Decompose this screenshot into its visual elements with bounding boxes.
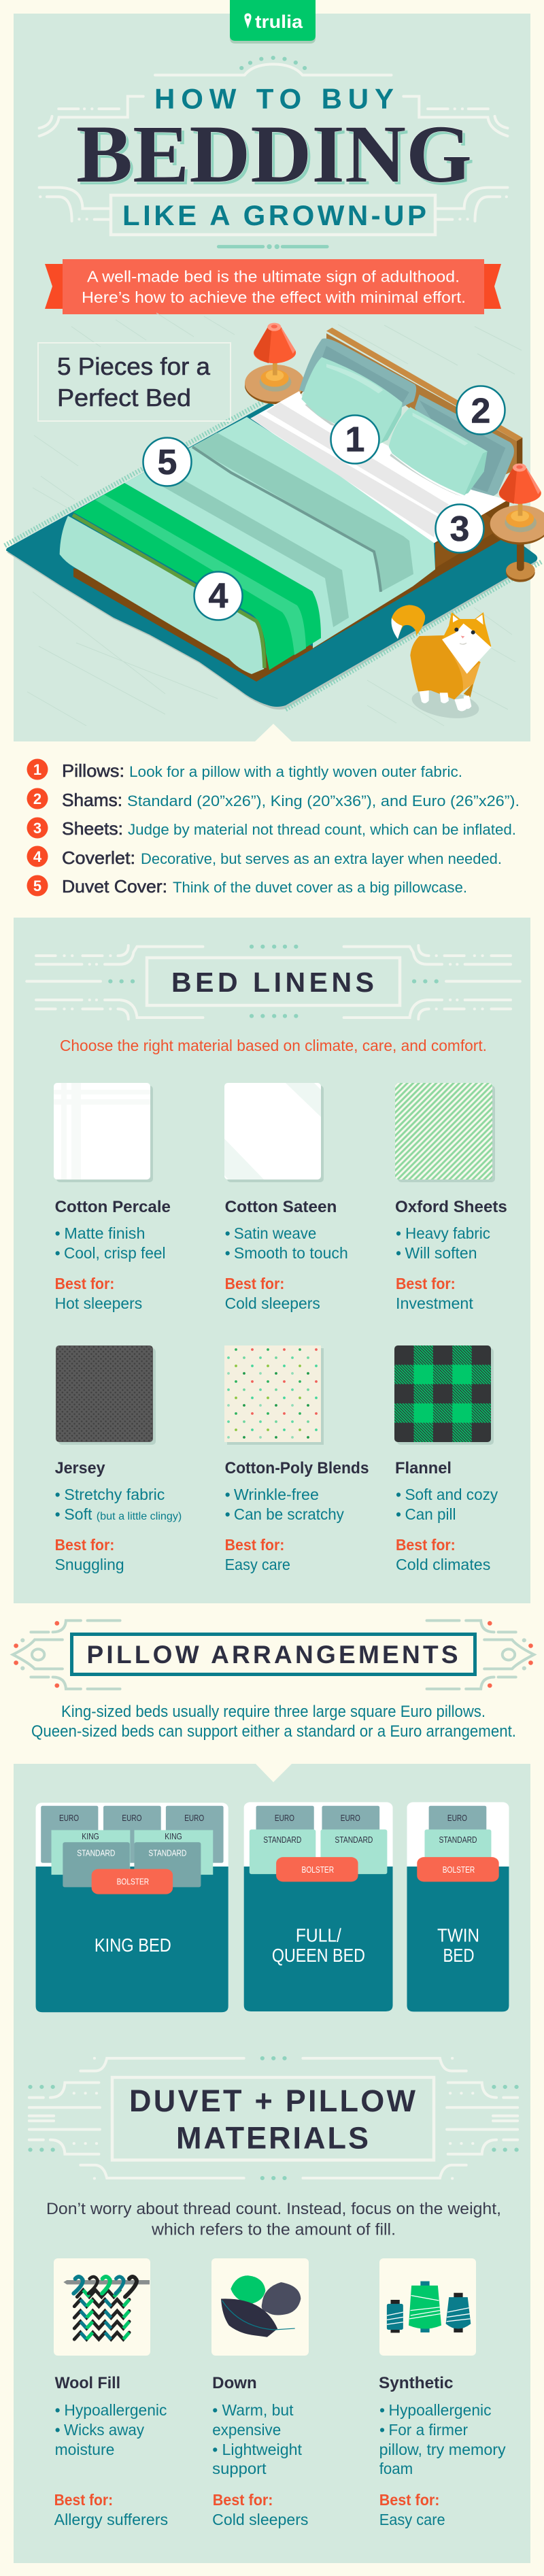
card: oxford sheets: • [396,1244,401,1262]
icon: thread spools [387,2281,471,2332]
diagram: full/queen bed: STANDARD [335,1835,373,1845]
duvet heading ornament [29,2058,517,2178]
card: jersey: Best for: [55,1536,114,1554]
card: jersey: • [55,1486,61,1503]
card: cotton-poly blends: Cotton-Poly Blends [225,1459,369,1477]
illustration: isometric bed with lamps and cat [5,313,544,726]
card: jersey: • [55,1505,61,1523]
card: oxford sheets: Will soften [405,1244,477,1262]
item 5 duvet cover: Think of the duvet cover as a big pillowcase. [173,879,467,896]
item 3 sheets: 3 [33,820,41,837]
card: cotton sateen: • [225,1224,231,1242]
card: synthetic: For a firmer [389,2421,468,2439]
card: wool fill: Hypoallergenic [64,2401,167,2419]
card: flannel: Flannel [395,1459,452,1477]
card: cotton percale: Best for: [55,1275,114,1292]
list: five pieces [27,759,520,897]
title ornament [39,58,507,247]
card: synthetic: Best for: [379,2491,439,2509]
card: cotton percale [54,1083,171,1312]
card: cotton-poly blends: Best for: [225,1536,284,1554]
card: down: • [212,2401,218,2419]
title: how to buy: HOW TO BUY [154,83,394,114]
item 5 duvet cover: Duvet Cover: [62,876,167,897]
duvet [124,417,435,648]
card: cotton-poly blends: • [225,1486,231,1503]
icon: knitting [63,2277,150,2339]
card: synthetic: • [379,2421,385,2439]
card: synthetic: Easy care [379,2511,445,2528]
card: cotton sateen: Satin weave [234,1224,316,1242]
item 1 pillows: Pillows: [62,760,124,781]
diagram: full/queen bed: FULL/ [296,1925,341,1945]
item 5 duvet cover: 5 [33,877,41,894]
diagram: full/queen bed: BOLSTER [302,1864,334,1875]
ribbon banner: Here’s how to achieve the effect with minimal effort. [82,288,466,306]
card: oxford sheets: • [396,1224,401,1242]
card: wool fill: Best for: [54,2491,113,2509]
card: down: Cold sleepers [212,2511,309,2528]
coverlet [73,483,321,670]
card: oxford sheets: Oxford Sheets [395,1198,507,1216]
diagram: king bed: BOLSTER [117,1876,149,1887]
bed frame [73,499,510,682]
panel: bed linens [14,918,530,1603]
card: down: Down [212,2374,257,2392]
card: cotton-poly blends [224,1345,369,1573]
panel: intro and bed illustration [14,14,530,741]
item 4 coverlet: 4 [33,848,42,865]
card: oxford sheets: Heavy fabric [405,1224,490,1242]
card: flannel: Best for: [396,1536,456,1554]
callout: 5 pieces [38,343,231,421]
heading: duvet + pillow materials: MATERIALS [176,2121,369,2155]
card: cotton sateen: Cotton Sateen [225,1198,337,1216]
ribbon banner [45,259,501,314]
card: cotton sateen: • [225,1244,231,1262]
bed linens ornament [27,946,520,1019]
card: cotton percale: • [55,1224,61,1242]
duvet stripes [160,433,413,627]
card: cotton percale: Cotton Percale [55,1198,171,1216]
card: synthetic [379,2258,506,2528]
card: down [211,2258,309,2528]
card: wool fill: Wicks away [64,2421,144,2439]
heading: bed linens [147,958,400,1005]
callout: 5 pieces: Perfect Bed [57,384,191,412]
diagram: full/queen bed: EURO [275,1813,294,1823]
diagram: king bed: EURO [59,1813,79,1823]
badge numerals: 2 [471,392,490,431]
card: down: Warm, but [222,2401,294,2419]
card: wool fill: Wool Fill [55,2374,120,2392]
item 2 shams [27,788,520,810]
card: wool fill [54,2258,168,2528]
card: synthetic: pillow, try memory [379,2441,506,2458]
card: oxford sheets: Best for: [396,1275,456,1292]
card: jersey: Soft [64,1505,92,1523]
card: synthetic: foam [379,2460,413,2477]
notch: pointer at panel bottom [255,724,292,741]
card: down: Lightweight [222,2441,303,2458]
heading: duvet + pillow materials [112,2077,434,2160]
card: jersey: Jersey [55,1459,105,1477]
card: cotton-poly blends: • [225,1505,231,1523]
item 2 shams: 2 [33,790,41,807]
item 4 coverlet [27,846,502,868]
card: cotton-poly blends: Can be scratchy [234,1505,344,1523]
item 2 shams: Standard (20”x26”), King (20”x36”), and Euro (26”x26”). [127,792,520,809]
badge numerals [158,392,490,616]
diagram: twin bed: BOLSTER [443,1864,475,1875]
text: thread count intro: which refers to the amount of fill. [151,2220,396,2239]
card: jersey [55,1345,182,1573]
heading: pillow arrangements: PILLOW ARRANGEMENTS [87,1641,458,1669]
diagram: king bed: STANDARD [148,1847,186,1858]
logo: trulia tab: trulia [255,12,303,32]
text: pillow intro: King-sized beds usually require three large square Euro pillows. [61,1703,486,1721]
card: wool fill: Allergy sufferers [54,2511,168,2528]
card: flannel: Cold climates [396,1556,490,1573]
card: flannel: Can pill [405,1505,456,1523]
card: down: expensive [212,2421,281,2439]
back pillow shams [299,338,514,498]
badge numerals: 4 [209,577,228,616]
card: oxford sheets: Investment [396,1294,473,1312]
callout: 5 pieces: 5 Pieces for a [57,352,211,380]
diagram: full/queen bed: EURO [341,1813,360,1823]
card: wool fill: • [55,2421,61,2439]
foot of bed [60,516,264,674]
card: cotton-poly blends: Easy care [225,1556,290,1573]
headboard [326,328,522,481]
diagram: king bed: STANDARD [77,1847,115,1858]
diagram: twin bed [407,1802,509,2011]
card: wool fill: • [55,2401,61,2419]
item 4 coverlet: Decorative, but serves as an extra layer when needed. [141,850,502,867]
heading: pillow arrangements [72,1634,475,1675]
card: down: • [212,2441,218,2458]
text: thread count intro: Don’t worry about thread count. Instead, focus on the weight, [46,2200,501,2218]
badge numerals: 1 [345,420,364,460]
pillow arrangements ornament [13,1620,534,1689]
heading: duvet + pillow materials: DUVET + PILLOW [129,2084,416,2118]
diagram: king bed: EURO [122,1813,141,1823]
cat [392,605,491,723]
item 4 coverlet: Coverlet: [62,848,135,868]
card: cotton sateen: Smooth to touch [234,1244,348,1262]
ribbon banner: A well-made bed is the ultimate sign of adulthood. [87,268,460,286]
right lamp and nightstand [490,463,544,582]
badge numerals: 3 [450,509,469,549]
card: synthetic: Synthetic [379,2374,453,2392]
title: bedding: BEDDING [79,112,475,203]
logo: trulia tab [230,0,316,44]
diagram: twin bed: EURO [447,1813,467,1823]
card: jersey: Stretchy fabric [64,1486,165,1503]
subheading: choose material: Choose the right material based on climate, care, and comfort. [60,1037,487,1054]
card: wool fill: moisture [55,2441,114,2458]
diagram: full/queen bed: QUEEN BED [272,1945,365,1966]
card: jersey: (but a little clingy) [97,1511,182,1522]
diagram: twin bed: TWIN [437,1925,479,1945]
card: cotton percale: Hot sleepers [55,1294,142,1312]
card: synthetic: Hypoallergenic [389,2401,491,2419]
card: flannel: Soft and cozy [405,1486,498,1503]
diagram: full/queen bed: STANDARD [263,1835,301,1845]
number badges [143,386,505,620]
panel: pillows and duvet [14,1764,530,2563]
card: jersey: Snuggling [55,1556,124,1573]
text: thread count intro [46,2200,501,2239]
card: down: support [212,2460,267,2477]
card: cotton percale: Matte finish [64,1224,145,1242]
card: flannel: • [396,1505,401,1523]
card: oxford sheets [395,1083,507,1312]
card: cotton sateen: Best for: [225,1275,284,1292]
front pillows [301,357,488,497]
diagram: king bed: KING [82,1831,99,1841]
diagram: twin bed: BED [443,1945,475,1966]
item 3 sheets [27,818,516,839]
title: bedding: BEDDING [76,109,472,200]
card: flannel: • [396,1486,401,1503]
item 3 sheets: Judge by material not thread count, which can be inflated. [128,821,516,838]
icon: feathers [221,2275,301,2337]
diagram: full/queen bed [244,1802,393,2011]
diagram: king bed: EURO [184,1813,204,1823]
diagram: king bed: KING [165,1831,182,1841]
card: down: Best for: [213,2491,273,2509]
item 1 pillows [27,759,462,781]
notch: pointer at panel top [256,1764,292,1782]
title: like a grown-up box: LIKE A GROWN-UP [122,199,426,231]
card: cotton-poly blends: Wrinkle-free [234,1486,319,1503]
card: synthetic: • [379,2401,385,2419]
diagram: twin bed: STANDARD [439,1835,477,1845]
item 3 sheets: Sheets: [62,818,123,839]
item 2 shams: Shams: [62,790,122,810]
card: cotton sateen [224,1083,348,1312]
item 1 pillows: 1 [33,761,41,778]
card: cotton sateen: Cold sleepers [225,1294,320,1312]
rug [5,399,541,709]
card: cotton percale: Cool, crisp feel [64,1244,166,1262]
left lamp and nightstand [245,323,305,404]
card: flannel [394,1345,498,1573]
diagram: king bed [36,1803,228,2012]
text: pillow intro [31,1703,516,1741]
fitted sheet [250,391,508,543]
heading: bed linens: BED LINENS [171,967,374,998]
badge numerals: 5 [158,443,177,482]
text: pillow intro: Queen-sized beds can support either a standard or a Euro arrangement. [31,1722,516,1741]
diagram: king bed: KING BED [95,1935,171,1956]
card: cotton percale: • [55,1244,61,1262]
item 5 duvet cover [27,875,467,897]
item 1 pillows: Look for a pillow with a tightly woven outer fabric. [129,763,462,780]
